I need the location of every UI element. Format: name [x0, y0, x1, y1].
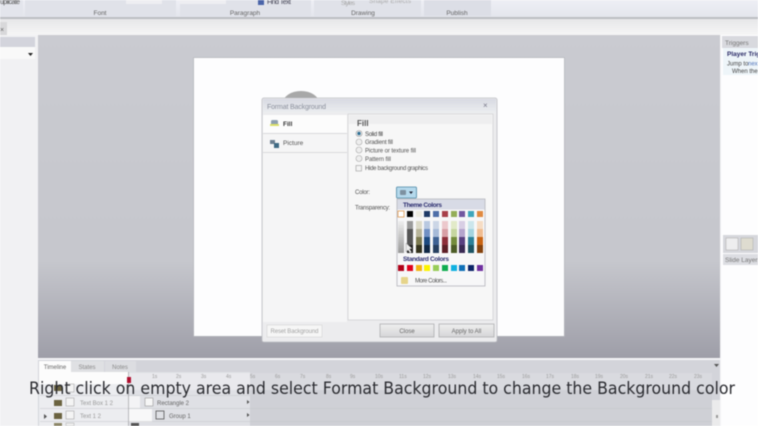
time ruler: 7s	[300, 374, 306, 380]
time ruler: 3s	[201, 374, 207, 380]
time ruler: 13s	[448, 374, 457, 380]
timeline rows: Text Box 1 2	[80, 401, 114, 407]
left panel: scenes	[0, 35, 36, 426]
time ruler: 10s	[375, 374, 384, 380]
dialog title bar	[263, 99, 496, 113]
timeline panel	[38, 358, 721, 426]
slide canvas	[194, 58, 564, 336]
time ruler: 18s	[571, 374, 580, 380]
workspace	[38, 35, 720, 358]
ribbon toolbar: Publish	[446, 10, 468, 17]
ribbon toolbar: Drawing	[351, 10, 375, 17]
caption: Right click on empty area and select Format Background to change the Background color	[29, 379, 735, 398]
buttons	[267, 324, 494, 337]
buttons: Reset Background	[270, 329, 318, 335]
dialog title bar: Format Background	[267, 104, 326, 111]
time ruler: 17s	[546, 374, 555, 380]
dialog tabs list: Picture	[283, 140, 304, 147]
ribbon toolbar: Styles	[341, 0, 356, 7]
time ruler: 12s	[423, 374, 432, 380]
timeline tabs: States	[78, 365, 96, 371]
fill options panel	[348, 114, 493, 320]
fill options panel: Gradient fill	[365, 140, 393, 146]
right panel: triggers	[721, 35, 758, 426]
timeline rows	[44, 384, 250, 426]
ribbon toolbar: Font	[93, 10, 107, 17]
ribbon toolbar: Paragraph	[230, 10, 261, 17]
time ruler: 6s	[275, 374, 281, 380]
fill options panel: Hide background graphics	[365, 166, 428, 172]
time ruler: 9s	[350, 374, 356, 380]
color picker popup	[397, 199, 485, 286]
time ruler: 4s	[226, 374, 232, 380]
fill options panel: Color:	[355, 190, 370, 196]
time ruler: 11s	[399, 374, 407, 380]
color shades	[398, 221, 483, 253]
time ruler: 16s	[522, 374, 531, 380]
tab band	[0, 19, 758, 35]
right panel: triggers: nex	[748, 62, 758, 68]
color button	[396, 187, 416, 198]
fill options panel: Transparency:	[355, 206, 390, 212]
time ruler: 22s	[669, 374, 678, 380]
theme colors	[398, 211, 483, 217]
dialog: Format Background	[262, 98, 497, 342]
timeline rows: Group 1	[169, 414, 191, 420]
timeline tabs	[39, 361, 136, 373]
more colors: More Colors...	[415, 278, 447, 284]
color picker popup: Standard Colors	[403, 256, 449, 263]
time ruler: 8s	[326, 374, 332, 380]
color picker popup: Theme Colors	[403, 202, 442, 209]
right panel: triggers: When the	[732, 69, 758, 75]
ribbon toolbar	[0, 0, 758, 19]
dialog title bar: ×	[483, 101, 488, 110]
time ruler: 2s	[176, 374, 182, 380]
timeline rows: Rectangle 2	[157, 401, 190, 407]
fill options panel: Solid fill	[365, 132, 383, 138]
time ruler: 23s	[694, 374, 703, 380]
time ruler: 1s	[152, 374, 158, 380]
fill options panel: Fill	[357, 119, 369, 128]
fill options panel: Pattern fill	[365, 157, 391, 163]
timeline tabs: Timeline	[44, 365, 67, 371]
right panel: triggers: Triggers	[725, 40, 749, 47]
timeline rows: Text 1 2	[80, 414, 102, 420]
time ruler: 5s	[250, 374, 256, 380]
mouse cursor	[406, 243, 412, 253]
tab band: ×	[0, 27, 4, 34]
time ruler: 15s	[497, 374, 506, 380]
right panel: triggers: Jump to	[727, 62, 749, 68]
time ruler	[152, 374, 703, 380]
buttons: Apply to All	[452, 329, 481, 335]
layers column	[39, 372, 712, 426]
fill options panel: Picture or texture fill	[365, 148, 416, 154]
dialog tabs list: Fill	[283, 121, 293, 128]
timeline tabs: Notes	[112, 365, 128, 371]
dialog tabs list	[263, 115, 347, 322]
buttons: Close	[399, 329, 415, 335]
time ruler: 14s	[473, 374, 482, 380]
time ruler: 20s	[620, 374, 629, 380]
time ruler: 21s	[645, 374, 654, 380]
standard colors	[398, 265, 483, 271]
time ruler: 19s	[595, 374, 604, 380]
